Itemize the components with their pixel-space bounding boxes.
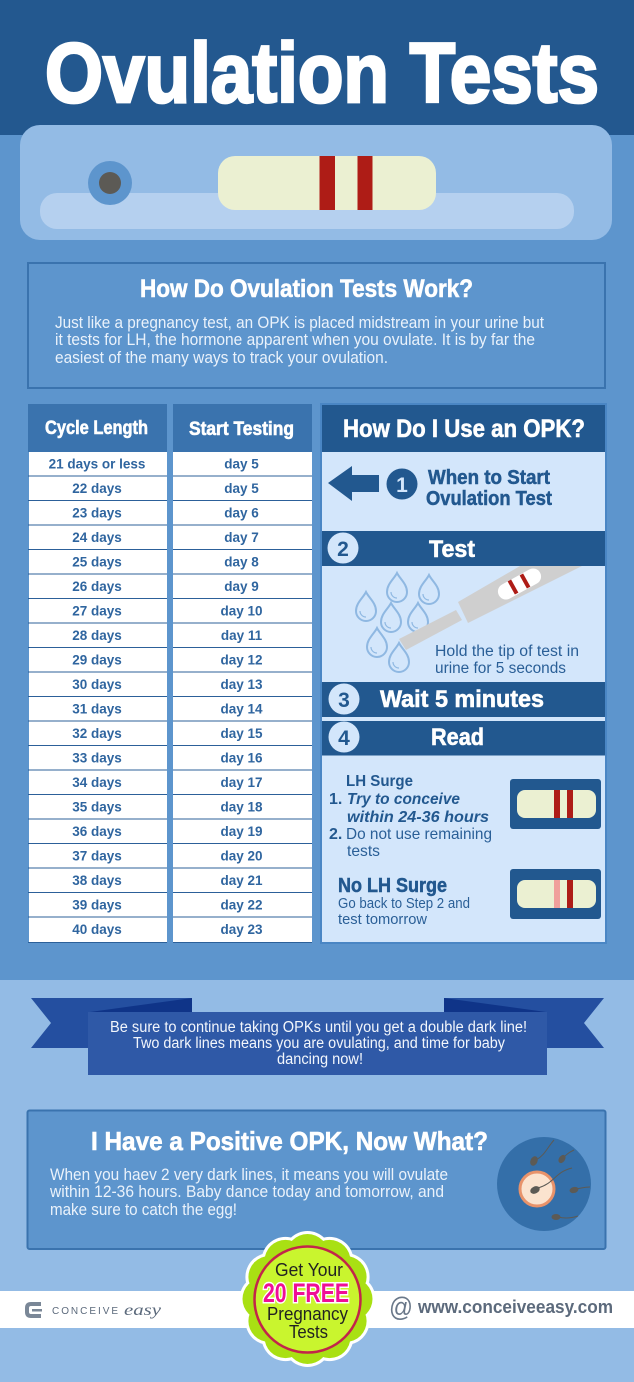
table header: start testing — [173, 404, 312, 452]
badge text: Get Your — [275, 1260, 343, 1280]
cycle length values: 21 days or less — [49, 456, 145, 472]
LH surge instructions: 1. — [329, 791, 342, 808]
step 3: wait band — [322, 682, 605, 717]
step 1: when to start — [328, 466, 552, 510]
cycle length values: 22 days — [72, 481, 122, 496]
cycle length values: 28 days — [72, 628, 122, 643]
start testing values: day 6 — [224, 506, 259, 520]
badge text: Tests — [289, 1322, 328, 1342]
start testing values: day 8 — [224, 554, 259, 570]
body text: it tests for LH, the hormone apparent when you ovulate. It is by far the — [55, 331, 535, 349]
step 3: wait band: Wait 5 minutes — [380, 686, 544, 713]
number 1: 1 — [396, 474, 408, 497]
body text: make sure to catch the egg! — [50, 1201, 237, 1219]
cycle length values: 27 days — [72, 604, 122, 618]
badge: free pregnancy tests — [240, 1231, 376, 1367]
step 2 caption: urine for 5 seconds — [435, 660, 566, 677]
body text: easiest of the many ways to track your ovulation. — [55, 349, 388, 367]
badge text — [263, 1260, 349, 1342]
body text: When you haev 2 very dark lines, it means you will ovulate — [50, 1166, 448, 1184]
logo: conceive easy: easy — [124, 1302, 162, 1319]
body text — [49, 1166, 448, 1219]
cycle length values: 40 days — [72, 922, 122, 937]
footer band — [0, 1291, 634, 1328]
ribbon banner — [31, 998, 604, 1075]
heading: How Do Ovulation Tests Work? — [140, 275, 473, 303]
step 2: test band — [322, 531, 605, 566]
cycle length values: 30 days — [72, 677, 122, 692]
start testing values: day 13 — [220, 677, 263, 692]
start testing values: day 23 — [220, 922, 263, 937]
panel heading: How Do I Use an OPK? — [343, 415, 585, 443]
start testing values: day 14 — [220, 702, 263, 716]
arrow — [328, 466, 379, 501]
start testing values: day 22 — [220, 898, 263, 912]
cycle length values: 35 days — [72, 800, 122, 814]
step 2: test band: 2 — [337, 538, 349, 561]
start testing values: day 10 — [220, 604, 263, 618]
badge text: Pregnancy — [267, 1304, 348, 1324]
cycle length values: 24 days — [72, 530, 122, 545]
table header: cycle length: Cycle Length — [45, 418, 148, 439]
start testing values: day 17 — [220, 775, 263, 790]
step 2: test band: Test — [429, 536, 475, 563]
cycle length values: 25 days — [72, 554, 122, 570]
start testing values: day 20 — [220, 848, 263, 864]
step 3: wait band: 3 — [338, 689, 350, 712]
header band — [0, 0, 634, 135]
cycle length values: 26 days — [72, 579, 122, 594]
website link — [389, 1292, 613, 1322]
LH surge instructions: LH Surge — [346, 773, 413, 790]
icon: negative test result — [510, 869, 601, 919]
no LH surge instructions — [338, 875, 470, 928]
ribbon text: Be sure to continue taking OPKs until you get a double dark line! — [110, 1019, 527, 1036]
LH surge instructions: within 24-36 hours — [347, 809, 489, 826]
start testing values — [220, 456, 263, 937]
panel heading — [322, 405, 605, 452]
cycle length values: 36 days — [72, 824, 122, 839]
heading: I Have a Positive OPK, Now What? — [91, 1126, 488, 1156]
icon: water drops — [356, 573, 439, 672]
step 4: read band — [322, 721, 605, 756]
step 1: when to start: When to Start — [428, 467, 550, 489]
start testing values: day 12 — [220, 652, 263, 668]
panel: how do I use an OPK — [321, 404, 606, 943]
step 2 caption: Hold the tip of test in — [435, 643, 579, 660]
badge white outline — [240, 1231, 376, 1367]
LH surge instructions: Try to conceive — [347, 791, 460, 808]
logo: conceive easy — [27, 1302, 162, 1319]
table rows background — [29, 452, 312, 942]
cycle length values: 23 days — [72, 506, 122, 520]
illustration: ovulation test device — [20, 125, 612, 240]
start testing values: day 19 — [220, 824, 263, 839]
cycle length values: 29 days — [72, 652, 122, 668]
panel: how do ovulation tests work — [28, 263, 605, 388]
no LH surge instructions: No LH Surge — [338, 875, 447, 897]
LH surge instructions: 2. — [329, 826, 342, 843]
ribbon text: dancing now! — [277, 1051, 363, 1068]
no LH surge instructions: test tomorrow — [338, 912, 428, 928]
step 2 caption — [435, 643, 579, 677]
panel: positive OPK — [28, 1110, 606, 1249]
ribbon text — [110, 1019, 527, 1068]
table: cycle length and start testing — [28, 404, 312, 943]
start testing values: day 5 — [224, 481, 259, 496]
no LH surge instructions: Go back to Step 2 and — [338, 896, 470, 912]
start testing values: day 21 — [220, 873, 263, 888]
website link: @ — [389, 1292, 413, 1322]
start testing values: day 7 — [224, 530, 259, 545]
logo: conceive easy: CONCEIVE — [52, 1306, 118, 1317]
cycle length values: 31 days — [72, 702, 122, 716]
start testing values: day 15 — [220, 726, 263, 741]
step 4: read band: 4 — [338, 727, 350, 750]
start testing values: day 5 — [224, 456, 259, 472]
icon: test stick — [399, 566, 582, 650]
icon: positive test result — [510, 779, 601, 829]
table header: start testing: Start Testing — [189, 419, 294, 440]
LH surge instructions: tests — [347, 843, 380, 860]
step 4: read band: Read — [431, 724, 484, 751]
LH surge instructions: Do not use remaining — [346, 826, 492, 843]
start testing values: day 16 — [220, 750, 263, 766]
cycle length values: 39 days — [72, 898, 122, 912]
ribbon text: Two dark lines means you are ovulating, and time for baby — [133, 1035, 505, 1052]
LH surge instructions — [329, 773, 492, 860]
cycle length values: 37 days — [72, 848, 122, 864]
cycle length values: 33 days — [72, 750, 122, 766]
table row separators — [28, 476, 312, 943]
cycle length values: 32 days — [72, 726, 122, 741]
start testing values: day 18 — [220, 800, 263, 814]
cycle length values — [49, 456, 145, 937]
website link: www.conceiveeasy.com — [417, 1297, 613, 1317]
cycle length values: 38 days — [72, 873, 122, 888]
body text: within 12-36 hours. Baby dance today and tomorrow, and — [49, 1183, 444, 1201]
badge text: 20 FREE — [263, 1278, 349, 1308]
table header: cycle length — [28, 404, 167, 452]
body text — [55, 314, 544, 367]
icon: egg and sperm — [497, 1137, 591, 1231]
number 1 — [386, 468, 418, 500]
step 1: when to start: Ovulation Test — [426, 488, 552, 510]
body text: Just like a pregnancy test, an OPK is placed midstream in your urine but — [55, 314, 544, 332]
cycle length values: 34 days — [72, 775, 122, 790]
badge green seal — [242, 1234, 372, 1364]
start testing values: day 9 — [224, 579, 259, 594]
start testing values: day 11 — [221, 628, 263, 643]
